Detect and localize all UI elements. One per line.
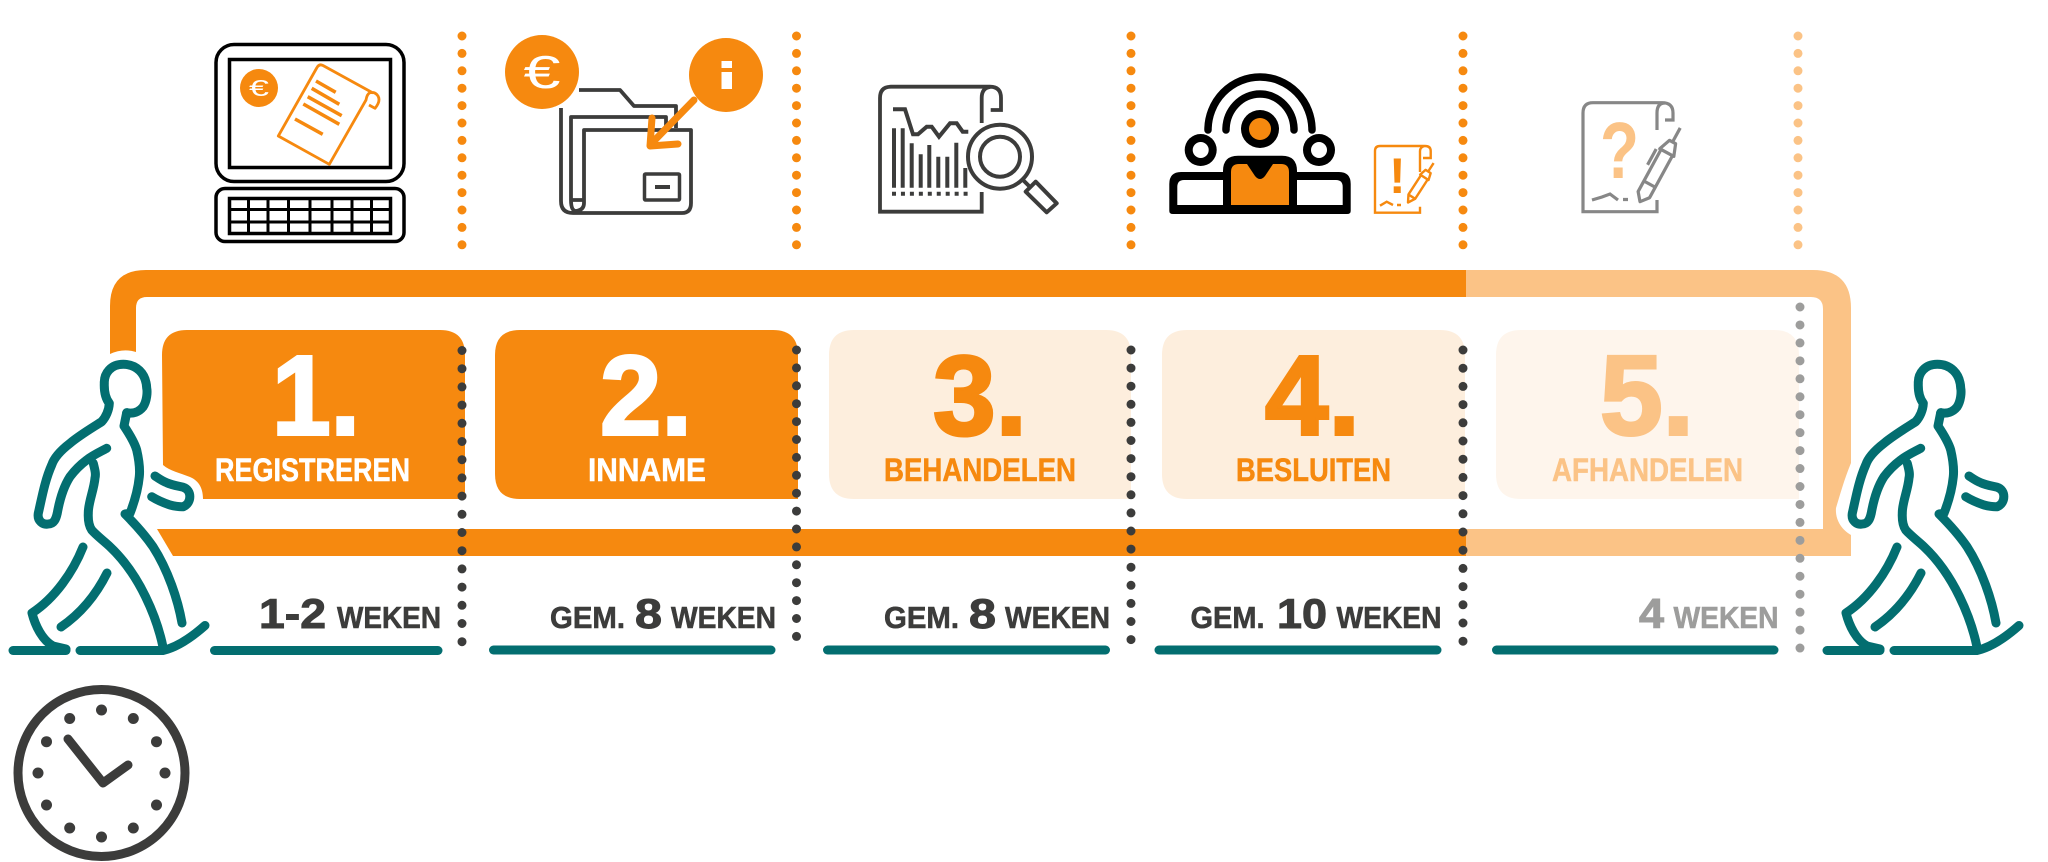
icon: three people with orange decision document: !	[1389, 148, 1406, 204]
panel: step 5 afhandelen: AFHANDELEN	[1552, 452, 1743, 488]
icon: clock	[18, 690, 185, 856]
panel: step 5 afhandelen: 5.	[1600, 332, 1694, 458]
icon: document with chart and magnifier	[880, 87, 1057, 212]
icon: grey document with question mark and pen: ?	[1600, 106, 1639, 195]
walker: left figure	[13, 364, 205, 650]
duration: 4 weken: WEKEN	[1674, 600, 1778, 635]
panel: step 3 behandelen	[829, 330, 1131, 499]
duration: gem. 8 weken (behandelen): GEM.	[884, 600, 959, 635]
duration: 1-2 weken: WEKEN	[337, 600, 441, 635]
panel: step 1 registreren: 1.	[272, 332, 360, 458]
duration: gem. 8 weken (inname): 8	[635, 590, 662, 637]
duration: gem. 10 weken	[1159, 590, 1442, 650]
icon: computer with invoice: €	[249, 75, 269, 101]
duration: gem. 10 weken: 10	[1277, 590, 1327, 637]
band: pending light frame	[1466, 270, 1851, 556]
panel: step 3 behandelen: 3.	[933, 332, 1027, 458]
icon: three people with orange decision document	[1169, 77, 1438, 214]
icon: grey document with question mark and pen	[1583, 103, 1687, 212]
panel: step 2 inname: INNAME	[588, 452, 706, 488]
duration: 4 weken	[1496, 590, 1778, 650]
duration: gem. 10 weken: GEM.	[1190, 600, 1264, 635]
duration: gem. 8 weken (inname)	[494, 590, 776, 650]
panel: step 2 inname: 2.	[600, 332, 692, 458]
duration: gem. 8 weken (behandelen)	[828, 590, 1110, 650]
duration: 1-2 weken: 1-2	[259, 590, 326, 637]
duration: gem. 8 weken (inname): WEKEN	[671, 600, 776, 635]
panel: step 1 registreren	[162, 330, 465, 499]
icon: folder with euro and info: €	[524, 46, 560, 98]
duration: 1-2 weken	[214, 590, 441, 650]
duration: gem. 8 weken (behandelen): 8	[969, 590, 996, 637]
band: active orange process frame	[110, 270, 1466, 556]
icon: folder with euro and info	[505, 35, 763, 213]
duration: gem. 8 weken (inname): GEM.	[550, 600, 625, 635]
panel: step 4 besluiten	[1162, 330, 1465, 499]
duration: gem. 8 weken (behandelen): WEKEN	[1005, 600, 1110, 635]
panel: step 3 behandelen: BEHANDELEN	[884, 452, 1076, 488]
walker: right figure	[1827, 364, 2019, 650]
duration: 4 weken: 4	[1639, 590, 1665, 637]
panel: step 2 inname	[495, 330, 798, 499]
panel: step 4 besluiten: 4.	[1265, 332, 1360, 458]
duration: gem. 10 weken: WEKEN	[1336, 600, 1442, 635]
icon: computer with invoice	[216, 44, 404, 242]
panel: step 1 registreren: REGISTREREN	[215, 452, 410, 488]
panel: step 4 besluiten: BESLUITEN	[1236, 452, 1391, 488]
panel: step 5 afhandelen	[1496, 330, 1799, 499]
